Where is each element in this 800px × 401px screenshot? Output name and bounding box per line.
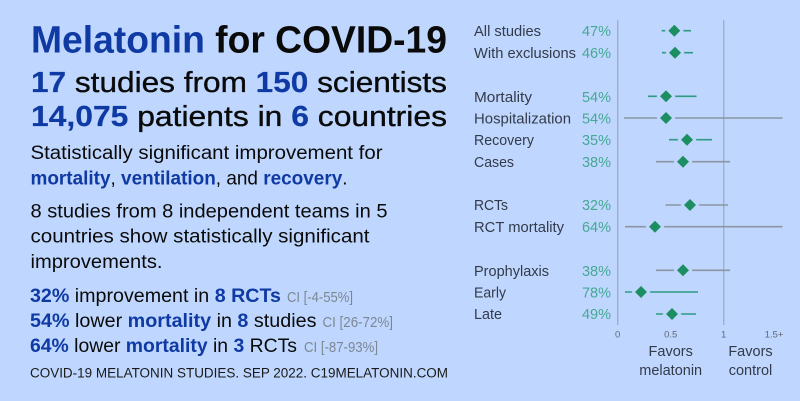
stat: RCT improvement: CI [-4-55%] bbox=[287, 289, 353, 306]
row: Hospitalization bbox=[474, 108, 782, 128]
text block: significant improvement: mortality, ventilation, and recovery. bbox=[30, 168, 348, 189]
heading: studies and scientists: 17 studies from 150 scientists bbox=[31, 67, 447, 99]
text block: independent teams: 8 studies from 8 independent teams in 5 bbox=[30, 202, 388, 222]
stat: mortality in RCTs: 64% lower mortality in 3 RCTs bbox=[30, 336, 297, 357]
stat: RCT improvement: 32% improvement in 8 RCTs bbox=[30, 286, 281, 307]
text block: significant improvement bbox=[30, 143, 383, 189]
label: favors control bbox=[728, 344, 773, 379]
row: RCT mortality bbox=[474, 217, 782, 236]
label: favors melatonin: Favors bbox=[649, 344, 693, 360]
row: RCTs: RCTs bbox=[474, 198, 508, 214]
axis labels: 1 bbox=[721, 330, 726, 340]
row: Early: Early bbox=[474, 286, 507, 302]
forest plot bbox=[474, 20, 784, 379]
row: Prophylaxis: 38% bbox=[582, 264, 611, 280]
text block: significant improvement: Statistically significant improvement for bbox=[30, 143, 383, 164]
axis labels: 0 bbox=[615, 330, 620, 340]
stat: mortality in RCTs: CI [-87-93%] bbox=[304, 339, 378, 356]
row: Mortality: Mortality bbox=[474, 90, 533, 106]
row: RCTs bbox=[474, 196, 728, 214]
row: Early: 78% bbox=[582, 286, 611, 302]
title: Melatonin for COVID-19 bbox=[31, 20, 447, 62]
row: Mortality: 54% bbox=[582, 90, 611, 106]
row: Prophylaxis: Prophylaxis bbox=[474, 264, 549, 280]
row: RCT mortality: 64% bbox=[582, 220, 611, 236]
row: All studies: 47% bbox=[582, 24, 611, 40]
stat: mortality in studies: 54% lower mortality in 8 studies bbox=[30, 311, 316, 332]
row: Cases: Cases bbox=[474, 155, 514, 171]
label: favors control: control bbox=[729, 363, 772, 379]
label: favors melatonin: melatonin bbox=[639, 363, 702, 379]
row: With exclusions: 46% bbox=[582, 46, 611, 62]
row: All studies bbox=[474, 21, 691, 40]
text block: independent teams: countries show statistically significant bbox=[30, 227, 370, 248]
text block: independent teams bbox=[30, 202, 388, 273]
label: favors melatonin bbox=[639, 344, 702, 379]
row: Prophylaxis bbox=[474, 261, 730, 280]
row: Cases bbox=[474, 152, 730, 171]
reference line: one bbox=[723, 20, 725, 325]
row: Hospitalization: 54% bbox=[582, 112, 611, 128]
row: Hospitalization: Hospitalization bbox=[474, 112, 571, 128]
text block: independent teams: improvements. bbox=[30, 252, 162, 273]
label: favors control: Favors bbox=[728, 344, 773, 360]
heading: patients and countries: 14,075 patients in 6 countries bbox=[31, 101, 447, 133]
row: Recovery bbox=[474, 130, 712, 149]
row: Late bbox=[474, 304, 696, 324]
axis labels: 0.5 bbox=[664, 330, 677, 340]
row: Recovery: 35% bbox=[582, 133, 611, 149]
row: With exclusions: With exclusions bbox=[474, 46, 576, 62]
stat: mortality in studies: CI [26-72%] bbox=[322, 314, 393, 331]
row: Late: 49% bbox=[582, 307, 611, 323]
row: Mortality bbox=[474, 87, 696, 106]
reference line: zero bbox=[617, 20, 619, 325]
row: RCT mortality: RCT mortality bbox=[474, 220, 565, 236]
footer: COVID-19 MELATONIN STUDIES. SEP 2022. C19MELATONIN.COM bbox=[30, 366, 448, 380]
row: Recovery: Recovery bbox=[474, 133, 535, 149]
axis labels bbox=[615, 330, 784, 340]
row: Cases: 38% bbox=[582, 155, 611, 171]
row: All studies: All studies bbox=[474, 24, 541, 40]
axis labels: 1.5+ bbox=[765, 330, 784, 340]
row: Late: Late bbox=[474, 307, 502, 323]
row: With exclusions bbox=[474, 43, 693, 62]
row: Early bbox=[474, 282, 698, 302]
row: RCTs: 32% bbox=[582, 198, 611, 214]
